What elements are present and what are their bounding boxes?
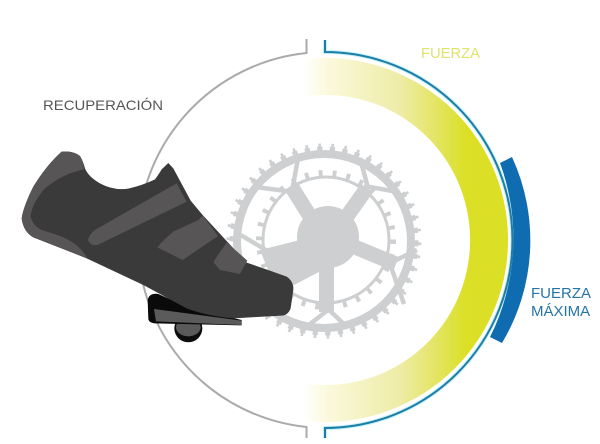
label: fuerza máxima: MÁXIMA: [531, 303, 590, 320]
pedal plate: [154, 309, 242, 325]
label: fuerza: FUERZA: [421, 45, 480, 62]
shoe heel panel: [22, 152, 87, 258]
blue force arc: [325, 40, 512, 438]
shoe body: [22, 152, 293, 318]
label: recuperación: RECUPERACIÓN: [43, 97, 163, 113]
chainring gear: [228, 146, 420, 336]
middle strap: [157, 215, 218, 260]
label: fuerza máxima: FUERZA: [531, 285, 591, 302]
lower strap: [213, 242, 247, 274]
pedal bearing: [174, 314, 202, 342]
grey recovery arc: [138, 39, 306, 438]
cycling shoe: [22, 152, 293, 318]
pedal body: [148, 294, 242, 325]
pedal: [148, 294, 242, 342]
maximum force blue band: [490, 157, 530, 343]
top strap: [88, 183, 187, 245]
yellow force band: [305, 58, 508, 422]
